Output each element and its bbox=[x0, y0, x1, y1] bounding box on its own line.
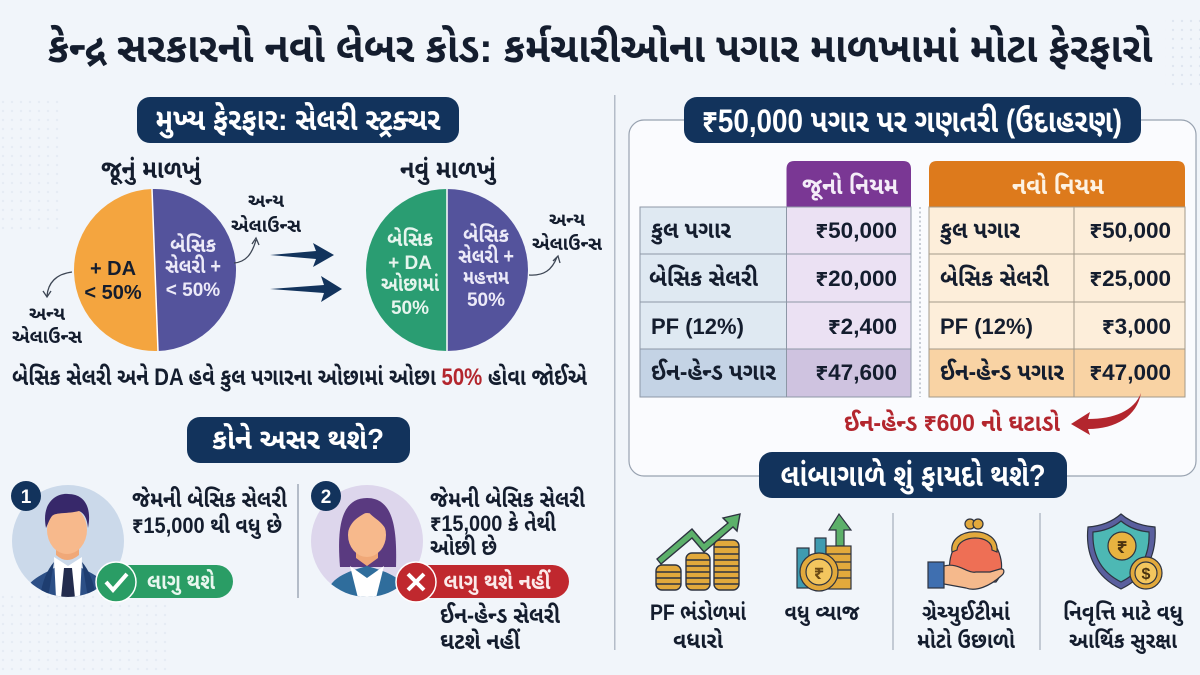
pie chart: new structure: સેલરી + bbox=[458, 243, 514, 268]
header: new rule: નવો નિયમ bbox=[1012, 172, 1105, 200]
label: other allowances top bbox=[231, 191, 302, 237]
header: old rule: જૂનો નિયમ bbox=[802, 172, 899, 201]
table: new rule: બેસિક સેલરી bbox=[940, 263, 1049, 292]
pie chart: new structure: બેસિક bbox=[387, 226, 434, 251]
divider bbox=[297, 484, 299, 598]
table: old rule: ₹47,600 bbox=[815, 360, 897, 385]
label: other allowances left: અન્ય bbox=[29, 304, 66, 325]
callout arrows bbox=[43, 238, 560, 297]
divider bbox=[919, 207, 921, 397]
text: in-hand will not decrease: ઘટશે નહીં bbox=[440, 628, 520, 654]
label: other allowances top: અન્ય bbox=[248, 191, 285, 212]
text: in-hand reduction: ઈન-હેન્ડ ₹600 નો ઘટાડો bbox=[844, 408, 1060, 437]
icon: shield and coin: $ bbox=[1142, 566, 1151, 583]
table: new rule bbox=[929, 161, 1185, 397]
heading: calculation on 50000 bbox=[684, 97, 1141, 143]
label: retirement security: નિવૃત્તિ માટે વધુ bbox=[1063, 600, 1184, 626]
icon: purse in hand bbox=[928, 519, 1004, 589]
label: gratuity jump: મોટો ઉછાળો bbox=[917, 628, 1016, 653]
icon: woman bbox=[311, 481, 423, 598]
icon: interest growth bbox=[797, 514, 851, 591]
pie chart: new structure: 50% bbox=[467, 290, 505, 311]
panel: long-term benefits bbox=[650, 452, 1184, 654]
text: basic up to 15000: ₹15,000 કે તેથી bbox=[430, 511, 557, 536]
pie chart: new structure: ઓછામાં bbox=[381, 272, 440, 296]
label: retirement security: આર્થિક સુરક્ષા bbox=[1069, 628, 1178, 654]
text: basic up to 15000: જેમની બેસિક સેલરી bbox=[430, 486, 585, 512]
badge: does not apply bbox=[396, 562, 569, 602]
label: PF fund growth: PF ભંડોળમાં bbox=[650, 600, 746, 625]
table: new rule: ₹3,000 bbox=[1102, 314, 1171, 339]
table: old rule: ₹20,000 bbox=[815, 266, 897, 291]
text: basic up to 15000: ઓછી છે bbox=[430, 534, 497, 560]
label: more interest: વધુ વ્યાજ bbox=[784, 600, 860, 626]
arrow: old to new bottom bbox=[270, 276, 342, 302]
badge: does not apply: લાગુ થશે નહીં bbox=[444, 569, 551, 595]
table: new rule: PF (12%) bbox=[940, 314, 1033, 339]
label: other allowances left bbox=[12, 304, 83, 348]
label: retirement security bbox=[1063, 600, 1184, 654]
label: PF fund growth: વધારો bbox=[673, 628, 724, 653]
text: in-hand will not decrease bbox=[440, 602, 560, 654]
header: new rule bbox=[929, 161, 1185, 207]
panel: who is affected bbox=[11, 417, 585, 654]
heading: long-term benefits: લાંબાગાળે શું ફાયદો થશે? bbox=[780, 457, 1046, 494]
badge: applies: લાગુ થશે bbox=[147, 569, 216, 595]
arrow: old to new top bbox=[270, 243, 334, 267]
text: in-hand will not decrease: ઈન-હેન્ડ સેલરી bbox=[440, 602, 560, 628]
text: basic up to 15000 bbox=[430, 486, 585, 560]
pie chart: old structure: + DA bbox=[90, 258, 136, 280]
pie chart: old structure: < 50% bbox=[84, 282, 142, 304]
icon: man bbox=[11, 481, 124, 598]
table: old rule: કુલ પગાર bbox=[651, 217, 731, 245]
icon: interest growth: ₹ bbox=[814, 563, 824, 583]
text: basic above 15000: ₹15,000 થી વધુ છે bbox=[132, 513, 282, 539]
table: new rule: કુલ પગાર bbox=[940, 217, 1020, 245]
title: કેન્દ્ર સરકારનો નવો લેબર કોડ: કર્મચારીઓના પગાર માળખામાં મોટા ફેરફારો bbox=[48, 24, 1153, 71]
panel: salary structure bbox=[12, 97, 603, 392]
pie chart: old structure bbox=[74, 189, 236, 351]
heading: old structure: જૂનું માળખું bbox=[101, 154, 202, 185]
table: old rule: PF (12%) bbox=[651, 314, 744, 339]
heading: salary structure bbox=[137, 97, 459, 143]
badge: applies bbox=[96, 562, 233, 602]
pie chart: new structure: + DA bbox=[388, 253, 432, 274]
panel: calculation example bbox=[629, 97, 1196, 476]
label: other allowances right: એલાઉન્સ bbox=[532, 232, 603, 255]
header: old rule bbox=[786, 161, 911, 207]
table: new rule: ₹50,000 bbox=[1089, 218, 1171, 243]
table: old rule: ₹50,000 bbox=[815, 218, 897, 243]
arrow: reduction bbox=[1071, 393, 1141, 435]
pie chart: new structure: મહત્તમ bbox=[463, 267, 509, 289]
text: basic above 15000: જેમની બેસિક સેલરી bbox=[132, 486, 287, 512]
table: new rule: ₹25,000 bbox=[1089, 266, 1171, 291]
text: minimum 50% rule: બેસિક સેલરી અને DA હવે કુલ પગારના ઓછામાં ઓછા 50% હોવા જોઈએ bbox=[12, 362, 587, 392]
heading: new structure: નવું માળખું bbox=[400, 154, 497, 185]
heading: salary structure: મુખ્ય ફેરફાર: સેલરી સ્ટ્રક્ચર bbox=[156, 101, 441, 138]
label: other allowances right bbox=[532, 210, 603, 255]
pie chart: old structure: બેસિક bbox=[170, 232, 217, 257]
pie chart: old structure: < 50% bbox=[166, 280, 220, 301]
heading: long-term benefits bbox=[759, 452, 1067, 498]
label: gratuity jump bbox=[917, 600, 1016, 653]
pie chart: new structure: 50% bbox=[391, 298, 429, 319]
heading: who is affected: કોને અસર થશે? bbox=[212, 422, 384, 456]
label: gratuity jump: ગ્રેચ્યુઈટીમાં bbox=[922, 600, 1011, 626]
label: PF fund growth bbox=[650, 600, 746, 653]
icon: shield and coin bbox=[1088, 514, 1162, 589]
heading: who is affected bbox=[187, 417, 410, 463]
heading: calculation on 50000: ₹50,000 પગાર પર ગણતરી (ઉદાહરણ) bbox=[702, 103, 1122, 139]
label: other allowances left: એલાઉન્સ bbox=[12, 325, 83, 348]
table: old rule: ₹2,400 bbox=[828, 314, 897, 339]
icon: coins and growth arrow bbox=[656, 514, 740, 590]
icon: man: 1 bbox=[21, 487, 32, 508]
table: old rule bbox=[640, 161, 911, 397]
table: new rule: ઈન-હેન્ડ પગાર bbox=[940, 357, 1065, 386]
label: other allowances right: અન્ય bbox=[549, 210, 586, 231]
table: old rule: ઈન-હેન્ડ પગાર bbox=[651, 357, 777, 386]
table: old rule: બેસિક સેલરી bbox=[649, 263, 758, 292]
icon: woman: 2 bbox=[321, 487, 331, 508]
table: new rule: ₹47,000 bbox=[1089, 360, 1171, 385]
text: basic above 15000 bbox=[132, 486, 287, 539]
pie chart: new structure bbox=[366, 189, 528, 351]
pie chart: new structure: બેસિક bbox=[463, 222, 510, 247]
dividers bbox=[893, 513, 1040, 650]
label: other allowances top: એલાઉન્સ bbox=[231, 214, 302, 237]
pie chart: old structure: સેલરી + bbox=[165, 253, 221, 278]
icon: shield and coin: ₹ bbox=[1117, 537, 1127, 558]
